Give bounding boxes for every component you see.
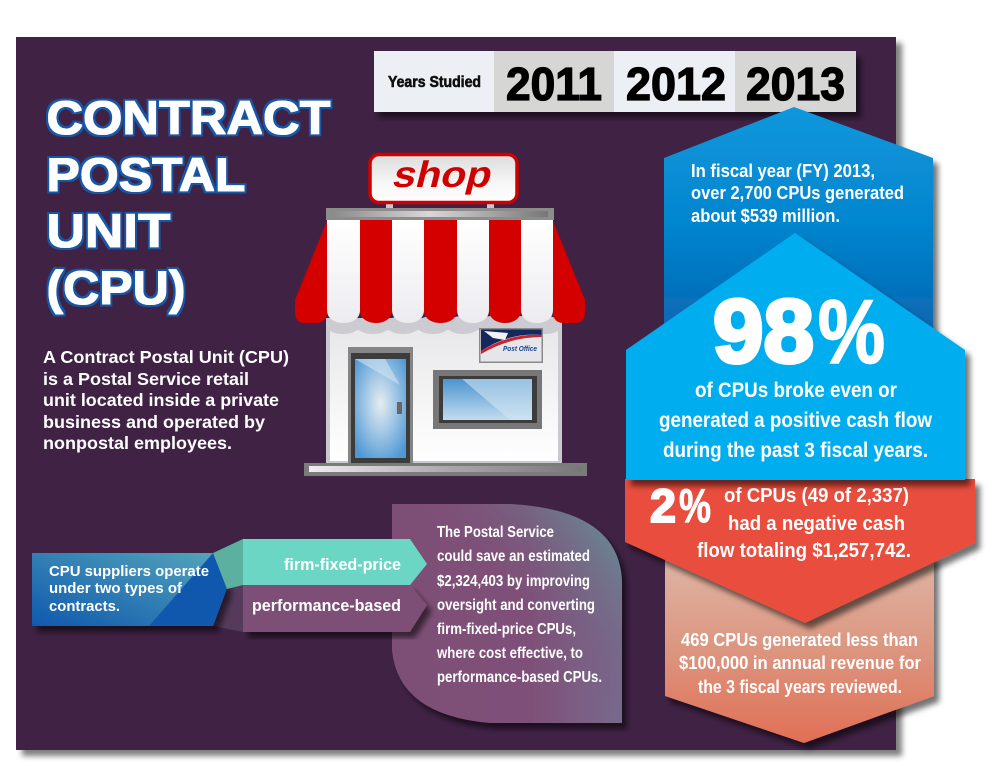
title xyxy=(46,91,331,314)
building wall xyxy=(326,318,562,464)
panel: red 2% stat xyxy=(625,479,975,623)
panel: bright blue 98% stat: % xyxy=(818,283,885,383)
definition text: is a Postal Service retail xyxy=(43,369,249,389)
panel: contract types flow xyxy=(32,504,622,723)
title: CONTRACT xyxy=(46,91,331,144)
floor step xyxy=(304,463,587,476)
panel: salmon revenue stat: the 3 fiscal years reviewed. xyxy=(698,677,902,697)
roof bar xyxy=(326,208,554,220)
panel: bright blue 98% stat xyxy=(626,233,965,480)
icon: shop building xyxy=(295,154,587,476)
definition text: A Contract Postal Unit (CPU) xyxy=(43,347,289,367)
savings text: could save an estimated xyxy=(437,548,590,565)
arrow: performance-based xyxy=(243,585,427,632)
panel: bright blue 98% stat: during the past 3 fiscal years. xyxy=(663,439,928,462)
years studied bar: 2012 xyxy=(626,58,726,110)
panel: blue FY 2013 stat xyxy=(664,107,933,360)
savings text xyxy=(436,524,602,686)
years studied bar: 2011 xyxy=(506,58,602,110)
arrow: firm-fixed-price: firm-fixed-price xyxy=(284,555,401,574)
panel: bright blue 98% stat: 98 xyxy=(713,282,814,382)
title: UNIT xyxy=(46,204,171,257)
title: (CPU) xyxy=(46,261,186,314)
box: suppliers text xyxy=(32,553,227,626)
panel: red 2% stat: had a negative cash xyxy=(728,512,905,535)
arrow: performance-based: performance-based xyxy=(252,596,401,615)
arrow: firm-fixed-price xyxy=(243,539,427,585)
definition text: unit located inside a private xyxy=(43,390,279,410)
savings text: The Postal Service xyxy=(437,524,554,541)
savings text: oversight and converting xyxy=(437,597,595,614)
definition text: business and operated by xyxy=(43,412,265,432)
definition text xyxy=(43,347,289,453)
savings text: where cost effective, to xyxy=(436,645,583,662)
panel: red 2% stat: flow totaling $1,257,742. xyxy=(697,539,911,562)
years studied bar xyxy=(374,51,856,112)
scallop shadow xyxy=(326,316,562,334)
panel: bright blue 98% stat: generated a positive cash flow xyxy=(659,409,933,432)
box: suppliers text: contracts. xyxy=(49,598,120,615)
savings text: $2,324,403 by improving xyxy=(437,573,590,590)
panel: blue FY 2013 stat: about $539 million. xyxy=(691,206,840,226)
panel: blue FY 2013 stat: In fiscal year (FY) 2013, xyxy=(691,161,875,181)
definition text: nonpostal employees. xyxy=(43,433,232,453)
panel: bright blue 98% stat: of CPUs broke even or xyxy=(695,379,897,402)
panel: savings callout xyxy=(392,504,622,723)
awning side flaps xyxy=(295,221,327,323)
icon: shop sign xyxy=(370,154,517,209)
icon: post office sign: Post Office xyxy=(503,344,537,353)
box: suppliers text: CPU suppliers operate xyxy=(49,563,209,580)
panel: red 2% stat: % xyxy=(679,479,711,532)
panel: salmon revenue stat: 469 CPUs generated less than xyxy=(681,630,918,650)
panel: red 2% stat: 2 xyxy=(650,479,676,532)
awning stripes xyxy=(327,220,553,323)
savings text: performance-based CPUs. xyxy=(437,669,602,686)
panel: salmon revenue stat: $100,000 in annual revenue for xyxy=(679,653,921,673)
title: POSTAL xyxy=(46,148,245,201)
savings text: firm-fixed-price CPUs, xyxy=(437,621,576,638)
connector: purple xyxy=(213,585,243,632)
icon: window xyxy=(433,370,542,429)
icon: shop sign: shop xyxy=(389,154,497,195)
years studied bar: 2013 xyxy=(746,58,845,110)
panel: red 2% stat: of CPUs (49 of 2,337) xyxy=(724,484,909,507)
years studied bar: Years Studied xyxy=(388,74,481,91)
connector: teal xyxy=(213,539,243,589)
box: suppliers text: under two types of xyxy=(49,580,183,597)
icon: post office sign xyxy=(479,328,543,363)
icon: door xyxy=(348,347,413,464)
panel: blue FY 2013 stat: over 2,700 CPUs generated xyxy=(691,183,904,203)
panel: salmon revenue stat xyxy=(665,555,934,743)
